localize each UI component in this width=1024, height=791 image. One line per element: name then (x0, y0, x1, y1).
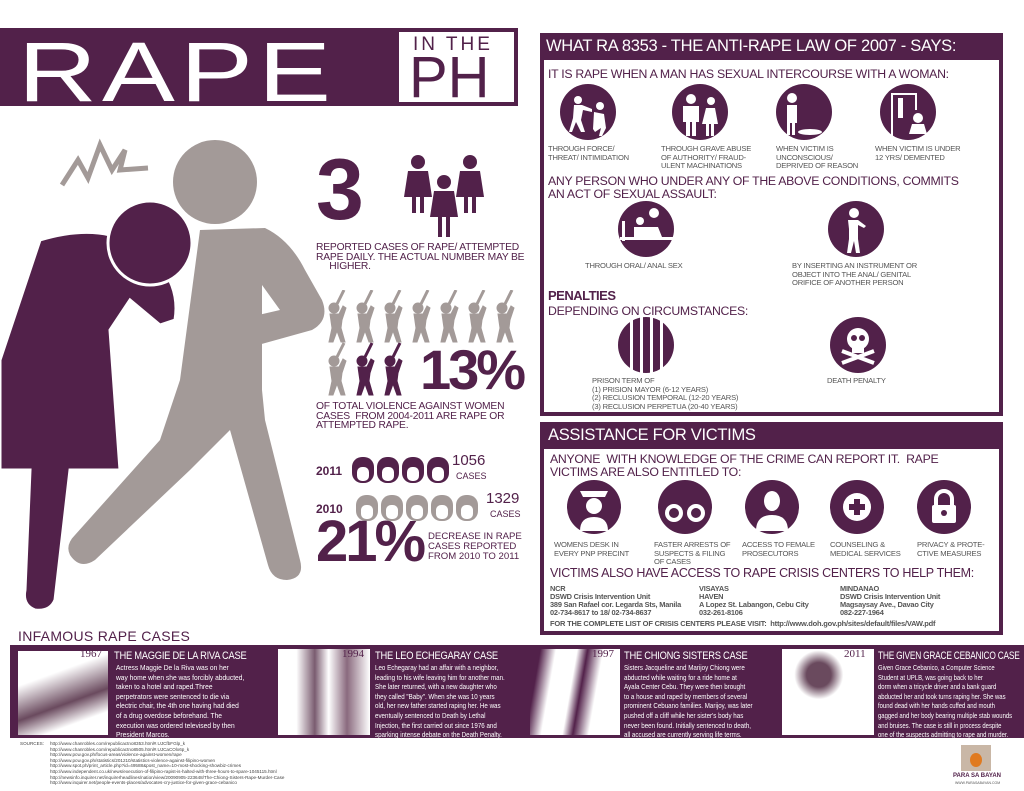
panel: assistance for victims: PRIVACY & PROTE- (917, 540, 984, 549)
sources: http://www.chanrobles.com/republicactno8505.html#.UJCaCOlx6p_k (50, 747, 189, 752)
row 2011 (316, 452, 487, 483)
case 1: way home when she was forcibly abducted, (116, 673, 244, 682)
case 3: Ayala Center Cebu. They were then brought (624, 682, 745, 691)
captions row 3: PRISON TERM OF (592, 376, 654, 385)
link text: FOR THE COMPLETE LIST OF CRISIS CENTERS PLEASE VISIT: http://www.doh.gov.ph/sites/default/files/VAW.pdf (550, 619, 935, 628)
case 3 (530, 648, 753, 739)
icon grid: batter figures (328, 290, 514, 396)
heading: sexual assault: AN ACT OF SEXUAL ASSAULT: (548, 187, 717, 201)
case 1: President Marcos. (116, 730, 170, 739)
intro text: VICTIMS ARE ALSO ENTITLED TO: (550, 465, 741, 479)
panel: anti-rape law: OBJECT INTO THE ANAL/ GENITAL (792, 270, 911, 279)
case 2: Injection, the first carried out since 1976 and (375, 721, 497, 730)
panel: infamous cases band (10, 645, 1024, 738)
case 2: old, her new father started raping her. He was (375, 701, 501, 710)
captions row 2: THROUGH ORAL/ ANAL SEX (585, 261, 682, 270)
text (428, 531, 522, 562)
row 2011: 2011 (316, 464, 342, 478)
sources: http://www.spot.ph/print_article.php?id=49588&post_name=10-most-shocking-showbiz-crimes (50, 763, 241, 768)
logo: para sa bayan: WWW.PARASABAYAN.COM (955, 781, 1000, 785)
text (316, 401, 504, 431)
panel: assistance for victims: A Lopez St. Labangon, Cebu City (699, 600, 809, 609)
text: RAPE DAILY. THE ACTUAL NUMBER MAY BE (316, 252, 524, 262)
heading: penalties: PENALTIES (548, 288, 616, 303)
crisis center addresses: NCR (550, 584, 565, 593)
case 2: Leo Echegaray had an affair with a neighbor, (375, 663, 498, 672)
sources: SOURCES: (20, 741, 44, 746)
captions: EVERY PNP PRECINT (554, 549, 629, 558)
heading: crisis centers: VICTIMS ALSO HAVE ACCESS TO RAPE CRISIS CENTERS TO HELP THEM: (550, 566, 974, 580)
icon: skull (830, 317, 886, 373)
captions (554, 540, 630, 558)
panel: assistance for victims: MEDICAL SERVICES (830, 549, 901, 558)
row 2011: CASES (456, 471, 487, 481)
icons row (567, 480, 971, 534)
captions row 3: (2) RECLUSION TEMPORAL (12-20 YEARS) (592, 393, 738, 402)
captions row 1: THROUGH FORCE/ (548, 144, 614, 153)
icon: unconscious (776, 84, 832, 140)
sources: http://newsinfo.inquirer.net/inquirerheadlines/nation/view/20090905-223648/The-Chiong-Sisters-Rape-Murder-Case (50, 775, 284, 780)
panel: assistance for victims: OF CASES (654, 557, 691, 566)
title box: IN THE PH: PH (409, 45, 490, 110)
heading: it is rape: IT IS RAPE WHEN A MAN HAS SEXUAL INTERCOURSE WITH A WOMAN: (548, 67, 949, 81)
case 3: pushed off a cliff while her sister's body has (624, 711, 743, 720)
icon: prison (618, 317, 674, 373)
stat: 13% (316, 290, 525, 431)
case 3: to a house and raped by members of several (624, 692, 747, 701)
panel: anti-rape law: BY INSERTING AN INSTRUMENT OR (792, 261, 917, 270)
panel: anti-rape law: THROUGH GRAVE ABUSE (661, 144, 751, 153)
panel: anti-rape law: OF AUTHORITY/ FRAUD- (661, 153, 746, 162)
panel: anti-rape law: ULENT MACHINATIONS (661, 161, 742, 170)
panel: assistance for victims: FASTER ARRESTS OF (654, 540, 730, 549)
panel: anti-rape law: 12 YRS/ DEMENTED (875, 153, 945, 162)
heading: infamous rape cases: INFAMOUS RAPE CASES (18, 628, 190, 644)
row 2010: CASES (490, 509, 521, 519)
crisis center addresses: 02-734-8617 to 18/ 02-734-8637 (550, 608, 651, 617)
case 1: Actress Maggie De la Riva was on her (116, 663, 229, 672)
panel: assistance for victims: CTIVE MEASURES (917, 549, 981, 558)
case 4: 2011 (844, 648, 866, 660)
case 4: one of the suspects admitting to rape and murder. (878, 730, 1008, 739)
case 4: Student at UPLB, was going back to her (878, 673, 983, 682)
logo: para sa bayan (953, 745, 1001, 785)
case 2: THE LEO ECHEGARAY CASE (375, 650, 498, 662)
case 4: THE GIVEN GRACE CEBANICO CASE (878, 650, 1020, 662)
panel: assistance for victims: ACCESS TO FEMALE (742, 540, 815, 549)
text (316, 242, 524, 272)
panel: anti-rape law: DEPENDING ON CIRCUMSTANCES: (548, 304, 748, 318)
case 3: all accused are currently serving life terms. (624, 730, 742, 739)
text: HIGHER. (329, 261, 371, 272)
case 1: electric chair, the 4th one having had died (116, 701, 239, 710)
captions: WOMENS DESK IN (554, 540, 619, 549)
intro text (550, 452, 938, 479)
row 2010 (316, 490, 521, 521)
case 1: THE MAGGIE DE LA RIVA CASE (114, 650, 246, 662)
illustration: attacker and victim (2, 138, 324, 609)
case 2 (278, 648, 505, 739)
panel: anti-rape law: DEATH PENALTY (827, 376, 886, 385)
case 4: gagged and her body bearing multiple stab wounds (878, 711, 1012, 720)
case 3: 1997 (592, 648, 614, 660)
text: ATTEMPTED RAPE. (316, 420, 408, 431)
case 2: they called "Baby". When she was 10 years (375, 692, 495, 701)
panel: assistance for victims: DSWD Crisis Intervention Unit (840, 592, 940, 601)
text: FROM 2010 TO 2011 (428, 551, 519, 562)
panel: assistance for victims: HAVEN (699, 592, 723, 601)
case 3: Sisters Jacqueline and Marijoy Chiong were (624, 663, 745, 672)
case 2: eventually sentenced to Death by Lethal (375, 711, 485, 720)
case 2: She later returned, with a new daughter who (375, 682, 497, 691)
icon: three women (404, 155, 484, 237)
panel: assistance for victims: Magsaysay Ave., Davao City (840, 600, 934, 609)
case 4: dorm when a tricycle driver and a bank guard (878, 682, 996, 691)
captions row 1: THREAT/ INTIMIDATION (548, 153, 629, 162)
panel: assistance for victims: PROSECUTORS (742, 549, 798, 558)
panel: assistance for victims (540, 422, 1003, 635)
big number 21%: 21% (316, 509, 423, 574)
case 4: found dead with her hands cuffed and mouth (878, 701, 995, 710)
case 1: of a drug overdose beforehand. The (116, 711, 222, 720)
case 1: execution was ordered televised by then (116, 721, 235, 730)
icon: force (560, 84, 616, 140)
panel header (540, 33, 1003, 60)
row 2011: 1056 (452, 452, 485, 469)
big number 13%: 13% (420, 338, 523, 401)
sources (20, 741, 284, 785)
case 4: and bruises. The case is still in process despite (878, 721, 1001, 730)
icon: oral/anal (618, 201, 674, 257)
case 1: taken to a hotel and raped.Three (116, 682, 213, 691)
sources: http://www.pcw.gov.ph/statistics/201210/statistics-violence-against-filipino-women (50, 758, 215, 763)
panel: anti-rape law: ORIFICE OF ANOTHER PERSON (792, 278, 903, 287)
icon: instrument (828, 201, 884, 257)
row 2010: 1329 (486, 490, 519, 507)
title: RAPE: RAPE (18, 25, 336, 119)
sources: http://www.pcw.gov.ph/focus-areas/violence-against-women/rape (50, 752, 182, 757)
icon: under 12 (880, 84, 936, 140)
sources: http://www.chanrobles.com/republicactno8353.html#.UJCfbFGlp_k (50, 741, 185, 746)
panel header (540, 422, 1003, 449)
case 2: sparking intense debate on the Death Penalty. (375, 730, 502, 739)
panel: anti-rape law: WHEN VICTIM IS UNDER (875, 144, 960, 153)
icon: abuse of authority (672, 84, 728, 140)
panel: assistance for victims: SUSPECTS & FILING (654, 549, 725, 558)
row 2010: 2010 (316, 502, 343, 516)
logo: para sa bayan: PARA SA BAYAN (953, 773, 1001, 779)
crisis center addresses: DSWD Crisis Intervention Unit (550, 592, 650, 601)
heading: sexual assault (548, 174, 959, 201)
purple victim (0, 201, 192, 610)
case 1: perpetrators were sentenced to die via (116, 692, 229, 701)
panel header: ASSISTANCE FOR VICTIMS (548, 426, 756, 444)
title box: IN THE PH (398, 31, 515, 103)
case 4: Given Grace Cebanico, a Computer Science (878, 663, 995, 672)
title box: IN THE PH: IN THE (413, 34, 493, 55)
panel: assistance for victims: 082-227-1964 (840, 608, 884, 617)
sources: http://www.independent.co.uk/news/execution-of-filipino-rapist-is-halted-with-three-hours-to-spare-1045115.html (50, 769, 277, 774)
panel: anti-rape law (540, 33, 1003, 416)
case 1: 1967 (80, 648, 102, 660)
captions row 3: (1) PRISION MAYOR (6-12 YEARS) (592, 385, 708, 394)
text: OF TOTAL VIOLENCE AGAINST WOMEN (316, 401, 504, 412)
heading: sexual assault: ANY PERSON WHO UNDER ANY OF THE ABOVE CONDITIONS, COMMITS (548, 174, 959, 188)
case 3: THE CHIONG SISTERS CASE (624, 650, 748, 662)
panel header: WHAT RA 8353 - THE ANTI-RAPE LAW OF 2007 - SAYS: (546, 37, 956, 55)
panel: anti-rape law: DEPRIVED OF REASON (776, 161, 858, 170)
case 2: 1994 (342, 648, 364, 660)
crisis center addresses (550, 584, 682, 617)
text: DECREASE IN RAPE (428, 531, 522, 542)
panel: assistance for victims: COUNSELING & (830, 540, 885, 549)
panel: assistance for victims: VISAYAS (699, 584, 729, 593)
case 3: prominent Cebuano families. Marijoy, was later (624, 701, 753, 710)
case 4: abducted her and took turns raping her. She was (878, 692, 1006, 701)
grey attacker (62, 140, 324, 580)
text: CASES REPORTED (428, 541, 516, 552)
big number 3: 3 (316, 142, 364, 238)
panel: anti-rape law: UNCONSCIOUS/ (776, 153, 833, 162)
panel: anti-rape law: WHEN VICTIM IS (776, 144, 834, 153)
title bar (0, 28, 518, 106)
crisis center addresses: 389 San Rafael cor. Legarda Sts, Manila (550, 600, 681, 609)
text: REPORTED CASES OF RAPE/ ATTEMPTED (316, 242, 519, 253)
text: CASES FROM 2004-2011 ARE RAPE OR (316, 410, 504, 422)
stat: cases 2011 vs 2010 (316, 452, 522, 574)
case 4 (782, 648, 1020, 739)
captions row 3 (592, 376, 738, 411)
sources: http://www.inquirer.net/people-events-places/advocates-cry-justice-for-given-grace-cebanico (50, 780, 237, 785)
case 2: leading to his wife leaving him for another man. (375, 673, 505, 682)
intro text: ANYONE WITH KNOWLEDGE OF THE CRIME CAN REPORT IT. RAPE (550, 452, 938, 466)
captions row 3: (3) RECLUSION PERPETUA (20-40 YEARS) (592, 402, 737, 411)
case 1 (18, 648, 246, 739)
case 3: never been found. Initially sentenced to death, (624, 721, 751, 730)
panel: assistance for victims: 032-261-8106 (699, 608, 743, 617)
case 3: abducted while waiting for a ride home at (624, 673, 737, 682)
stat: 3 daily (316, 142, 524, 272)
captions row 1 (548, 144, 629, 162)
panel: assistance for victims: MINDANAO (840, 584, 879, 593)
